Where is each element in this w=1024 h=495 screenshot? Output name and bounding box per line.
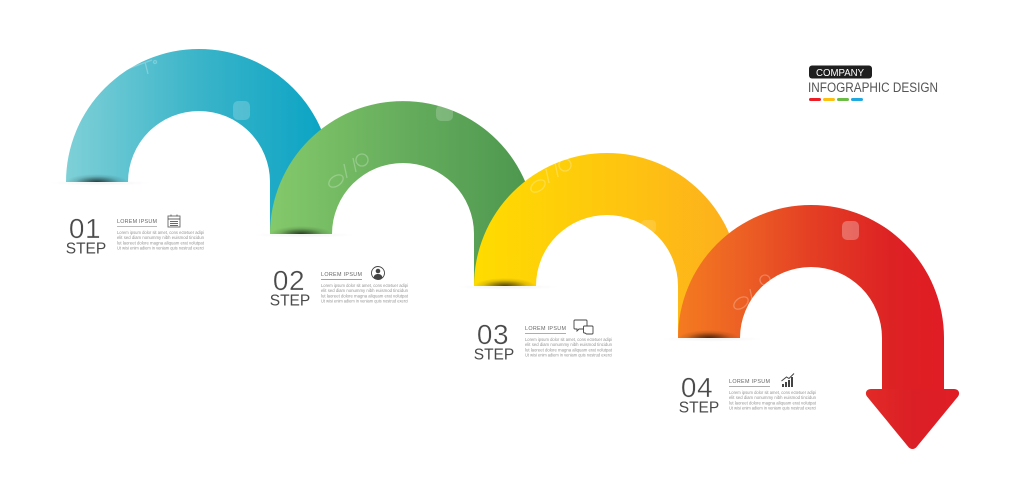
label STEP: STEP [679, 400, 719, 416]
icon: growth chart [782, 374, 794, 387]
step 1 text [66, 213, 205, 258]
number 02: 02 [273, 265, 305, 296]
body text: lut laoreet dolore magna aliquam erat volutpat [729, 400, 817, 406]
band shadow: step 3 [474, 270, 536, 286]
icon: speech bubbles [574, 320, 593, 334]
label STEP: STEP [66, 240, 106, 258]
band shadow: step 4 [678, 322, 740, 338]
body text: elit sed diam nonummy nibh euismod tincidun [729, 395, 816, 400]
body text: lut laoreet dolore magna aliquam erat volutpat [525, 348, 613, 352]
band shadow: step 2 [270, 218, 332, 234]
icon: person [372, 266, 384, 280]
colour dashes [809, 98, 863, 101]
body text: elit sed diam nonummy nibh euismod tincidun [525, 342, 612, 347]
watermarks [130, 60, 859, 312]
body text: lut laoreet dolore magna aliquam erat volutpat [321, 294, 409, 298]
body text: Ut wisi enim adiem in veniam quis nostrud exerci [321, 298, 408, 304]
company label: COMPANY [816, 67, 864, 79]
step 3 text [474, 319, 613, 364]
title block [808, 66, 938, 101]
number 01: 01 [69, 213, 101, 244]
arc: step 2 green [270, 101, 536, 286]
heading: LOREM IPSUM [525, 326, 566, 332]
body text [525, 337, 613, 358]
arc: step 4 orange-red with shaft [678, 205, 944, 395]
arc: step 1 blue [66, 49, 332, 234]
floor shadow: step 2 [252, 232, 356, 238]
band shadow: step 1 [66, 166, 128, 182]
body text: elit sed diam nonummy nibh euismod tincidun [117, 235, 204, 240]
floor shadow: step 3 [456, 284, 560, 290]
step 2 text [270, 265, 409, 310]
floor shadow: step 4 [660, 336, 764, 342]
heading: LOREM IPSUM [321, 272, 362, 278]
company badge [809, 66, 872, 78]
floor shadow: step 1 [48, 180, 152, 186]
number 04: 04 [681, 372, 713, 403]
body text: lut laoreet dolore magna aliquam erat volutpat [117, 240, 205, 246]
body text: Lorem ipsum dolor sit amet, cons ectetuer adipi [525, 337, 612, 342]
label STEP: STEP [270, 292, 310, 310]
body text: Lorem ipsum dolor sit amet, cons ectetuer adipi [321, 283, 408, 288]
heading: LOREM IPSUM [117, 219, 158, 225]
icon: calendar [168, 214, 180, 227]
body text: Ut wisi enim adiem in veniam quis nostrud exerci [729, 406, 816, 410]
number 03: 03 [477, 319, 509, 350]
step 4 text [679, 372, 817, 416]
body text [321, 283, 409, 304]
body text [729, 390, 817, 410]
body text: Ut wisi enim adiem in veniam quis nostrud exerci [117, 246, 204, 250]
label STEP: STEP [474, 346, 514, 364]
arrow head [866, 389, 959, 449]
arc: step 3 yellow [474, 153, 740, 338]
body text: Lorem ipsum dolor sit amet, cons ectetuer adipi [729, 390, 816, 395]
body text: Lorem ipsum dolor sit amet, cons ectetuer adipi [117, 230, 204, 235]
heading: LOREM IPSUM [729, 379, 770, 385]
title text: INFOGRAPHIC DESIGN [808, 80, 938, 95]
body text: elit sed diam nonummy nibh euismod tincidun [321, 288, 408, 293]
body text [117, 230, 205, 250]
body text: Ut wisi enim adiem in veniam quis nostrud exerci [525, 352, 612, 358]
